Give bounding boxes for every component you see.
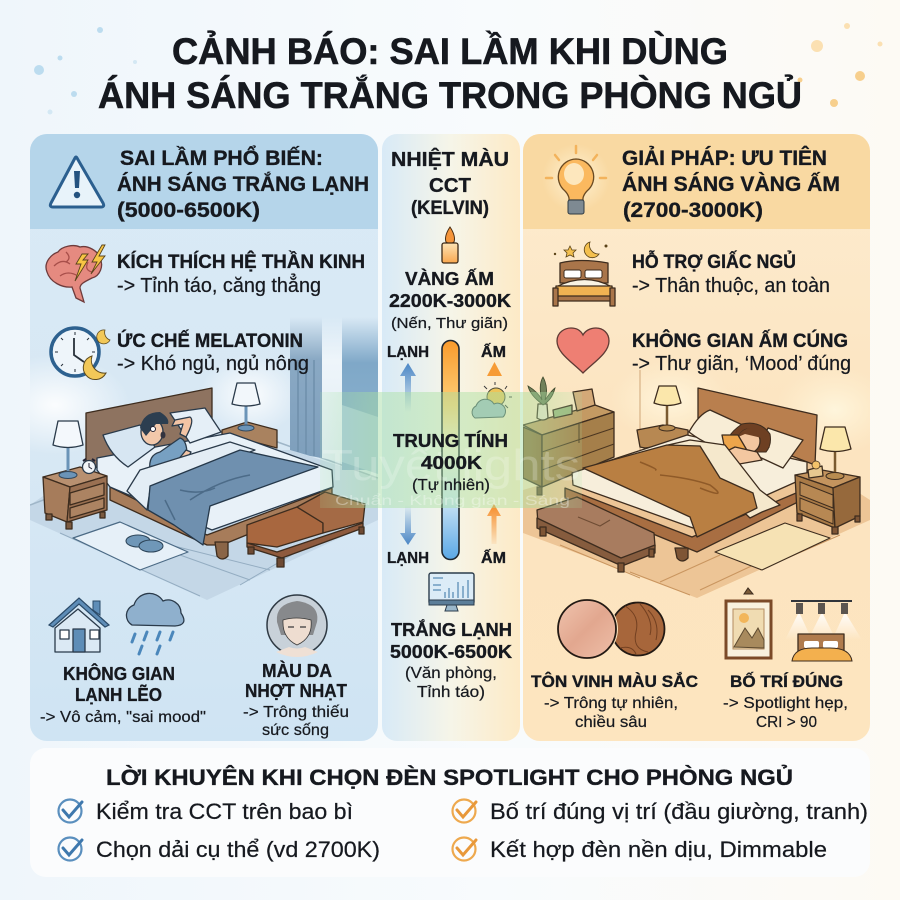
checklist item: combine dimmable: Kết hợp đèn nền dịu, Dimmable bbox=[490, 837, 827, 862]
text: cold white range: Tỉnh táo) bbox=[417, 684, 485, 701]
icon: spotlights over bed bbox=[785, 601, 862, 661]
headboard bbox=[698, 388, 817, 465]
illustration: woman sleeping in warm-lit bedroom bbox=[523, 370, 870, 598]
text: pale skin bbox=[243, 660, 349, 739]
text: enhances colors: -> Trông tự nhiên, bbox=[544, 695, 678, 712]
label: cold bottom: LẠNH bbox=[387, 550, 429, 567]
left nightstand with lamp bbox=[637, 386, 688, 448]
icon: candle bbox=[442, 227, 458, 263]
heading: solution bbox=[622, 146, 840, 222]
bed leg bbox=[675, 548, 688, 561]
heading: solution: GIẢI PHÁP: ƯU TIÊN bbox=[622, 146, 827, 170]
text: pale skin: NHỢT NHẠT bbox=[245, 681, 347, 701]
heading: solution: ÁNH SÁNG VÀNG ẤM bbox=[622, 173, 840, 196]
left lamp bbox=[53, 421, 83, 478]
bench bbox=[537, 497, 655, 572]
text: pale skin: MÀU DA bbox=[262, 660, 332, 681]
man in bed bbox=[140, 412, 192, 466]
woman sleeping bbox=[722, 423, 770, 466]
panel: color temperature scale bbox=[382, 134, 520, 741]
title: CẢNH BÁO: SAI LẦM KHI DÙNG bbox=[172, 30, 728, 72]
text: cold white range bbox=[390, 619, 512, 701]
icon: bed with moon and stars bbox=[553, 242, 615, 306]
text: cold white range: (Văn phòng, bbox=[405, 665, 497, 682]
text: nervous stimulation bbox=[117, 249, 365, 297]
arrow: warm up bbox=[487, 504, 501, 544]
text: enhances colors: TÔN VINH MÀU SẮC bbox=[531, 672, 698, 691]
brown blanket bbox=[583, 445, 757, 537]
label: warm bottom: ẤM bbox=[481, 550, 506, 567]
text: cold space: KHÔNG GIAN bbox=[63, 663, 175, 684]
text: correct placement bbox=[723, 671, 848, 731]
right lamp and books bbox=[808, 427, 851, 480]
text: cozy space: -> Thư giãn, ‘Mood’ đúng bbox=[632, 353, 851, 375]
text: enhances colors bbox=[531, 672, 698, 731]
icon: sun and cloud bbox=[472, 382, 512, 418]
arrow: cold down bbox=[400, 505, 416, 545]
panel: common mistake (cold white light) bbox=[0, 134, 378, 741]
text: warm yellow range: VÀNG ẤM bbox=[405, 268, 494, 289]
bed legs bbox=[215, 542, 228, 559]
panel: advice for choosing spotlight bbox=[30, 748, 870, 877]
mattress bbox=[572, 435, 807, 528]
bed frame bbox=[565, 485, 815, 552]
watermark: Tuyết lights bbox=[322, 441, 580, 490]
text: neutral bbox=[393, 430, 508, 494]
text: nervous stimulation: -> Tỉnh táo, căng thẳng bbox=[117, 273, 321, 297]
icon: rain cloud bbox=[126, 593, 184, 654]
headboard bbox=[86, 388, 212, 470]
icon: warning triangle bbox=[50, 157, 104, 207]
text: nervous stimulation: KÍCH THÍCH HỆ THẦN KINH bbox=[117, 249, 365, 273]
arrow: warm triangle bbox=[487, 362, 502, 376]
heading: CCT bbox=[391, 147, 509, 219]
text: correct placement: BỐ TRÍ ĐÚNG bbox=[730, 671, 843, 691]
text: supports sleep bbox=[632, 249, 830, 297]
right nightstand bbox=[795, 470, 860, 534]
heading: advice: LỜI KHUYÊN KHI CHỌN ĐÈN SPOTLIGHT CHO PHÒNG NGỦ bbox=[106, 765, 793, 790]
bed frame bbox=[110, 487, 332, 545]
arrow: cold up bbox=[400, 363, 416, 412]
title: ÁNH SÁNG TRẮNG TRONG PHÒNG NGỦ bbox=[98, 74, 802, 116]
icon: pale face bbox=[267, 595, 327, 657]
window and curtains bbox=[290, 317, 378, 474]
heading: CCT: CCT bbox=[429, 175, 471, 197]
heading: common mistake: ÁNH SÁNG TRẮNG LẠNH bbox=[117, 172, 369, 196]
text: cold white range: TRẮNG LẠNH bbox=[391, 619, 512, 640]
rug and slippers bbox=[73, 522, 188, 570]
heading: common mistake bbox=[117, 146, 369, 222]
text: neutral: (Tự nhiên) bbox=[412, 477, 490, 494]
pillows bbox=[103, 408, 221, 467]
text: cold space bbox=[40, 663, 206, 726]
plant and frame on dresser bbox=[528, 377, 595, 420]
heading: CCT: NHIỆT MÀU bbox=[391, 147, 509, 171]
text: supports sleep: HỖ TRỢ GIẤC NGỦ bbox=[632, 249, 796, 273]
mattress bbox=[97, 433, 333, 530]
heading: solution: (2700-3000K) bbox=[623, 199, 763, 222]
room wall and floor bbox=[30, 364, 378, 600]
bench bbox=[247, 492, 365, 567]
right nightstand with lamp bbox=[222, 383, 277, 448]
left nightstand bbox=[43, 467, 107, 529]
text: melatonin suppression: -> Khó ngủ, ngủ nông bbox=[117, 353, 309, 375]
watermark bbox=[320, 392, 582, 508]
room wall and floor bbox=[523, 370, 870, 598]
icon: brain with lightning bbox=[46, 245, 105, 302]
decorative dots: top left bbox=[34, 27, 137, 114]
text: cozy space: KHÔNG GIAN ẤM CÚNG bbox=[632, 328, 848, 352]
blue blanket bbox=[148, 450, 318, 545]
text: enhances colors: chiều sâu bbox=[575, 714, 647, 731]
text: correct placement: CRI > 90 bbox=[756, 714, 817, 731]
label: cold top: LẠNH bbox=[387, 344, 429, 361]
text: pale skin: sức sống bbox=[262, 722, 329, 739]
text: supports sleep: -> Thân thuộc, an toàn bbox=[632, 275, 830, 297]
text: warm yellow range: 2200K-3000K bbox=[389, 291, 511, 311]
white sheet fold bbox=[127, 442, 255, 510]
checklist item: correct position: Bố trí đúng vị trí (đầu giường, tranh) bbox=[490, 799, 868, 824]
text: melatonin suppression bbox=[117, 328, 309, 375]
rug bbox=[715, 523, 830, 570]
text: melatonin suppression: ỨC CHẾ MELATONIN bbox=[117, 328, 303, 352]
icon: heart bbox=[557, 328, 609, 373]
thermometer bar bbox=[442, 340, 459, 560]
pillows bbox=[689, 410, 803, 468]
heading: CCT: (KELVIN) bbox=[411, 198, 489, 219]
label: warm top: ẤM bbox=[481, 344, 506, 361]
heading: common mistake: SAI LẦM PHỔ BIẾN: bbox=[120, 146, 323, 170]
decorative dots: top right bbox=[798, 23, 882, 107]
panel: solution (warm yellow light) bbox=[523, 134, 895, 741]
heading: common mistake: (5000-6500K) bbox=[117, 199, 260, 222]
icon: skin and wood color swatches bbox=[556, 598, 664, 660]
text: cold white range: 5000K-6500K bbox=[390, 642, 512, 662]
icon: light bulb bbox=[542, 144, 610, 214]
checklist item: check CCT: Kiểm tra CCT trên bao bì bbox=[96, 799, 353, 824]
text: cold space: -> Vô cảm, "sai mood" bbox=[40, 709, 206, 726]
icon: house bbox=[49, 598, 109, 652]
alarm clock bbox=[82, 459, 96, 474]
watermark: Chuẩn - Không gian - Sáng bbox=[335, 492, 570, 508]
text: neutral: 4000K bbox=[421, 453, 482, 473]
text: neutral: TRUNG TÍNH bbox=[393, 430, 508, 451]
text: cold space: LẠNH LẼO bbox=[75, 684, 162, 705]
icon: clock with moon bbox=[51, 328, 110, 380]
text: correct placement: -> Spotlight hẹp, bbox=[723, 695, 848, 712]
cream sheet bbox=[668, 440, 780, 518]
illustration: man awake in cold-lit bedroom bbox=[0, 317, 378, 600]
text: warm yellow range: (Nến, Thư giãn) bbox=[391, 315, 508, 332]
checklist item: choose range: Chọn dải cụ thể (vd 2700K) bbox=[96, 837, 380, 862]
icon: computer monitor bbox=[429, 573, 474, 611]
icon: framed picture bbox=[726, 588, 771, 658]
text: cozy space bbox=[632, 328, 851, 375]
dresser bbox=[523, 405, 614, 495]
text: warm yellow range bbox=[389, 268, 511, 332]
title bbox=[98, 30, 802, 116]
text: pale skin: -> Trông thiếu bbox=[243, 704, 349, 721]
